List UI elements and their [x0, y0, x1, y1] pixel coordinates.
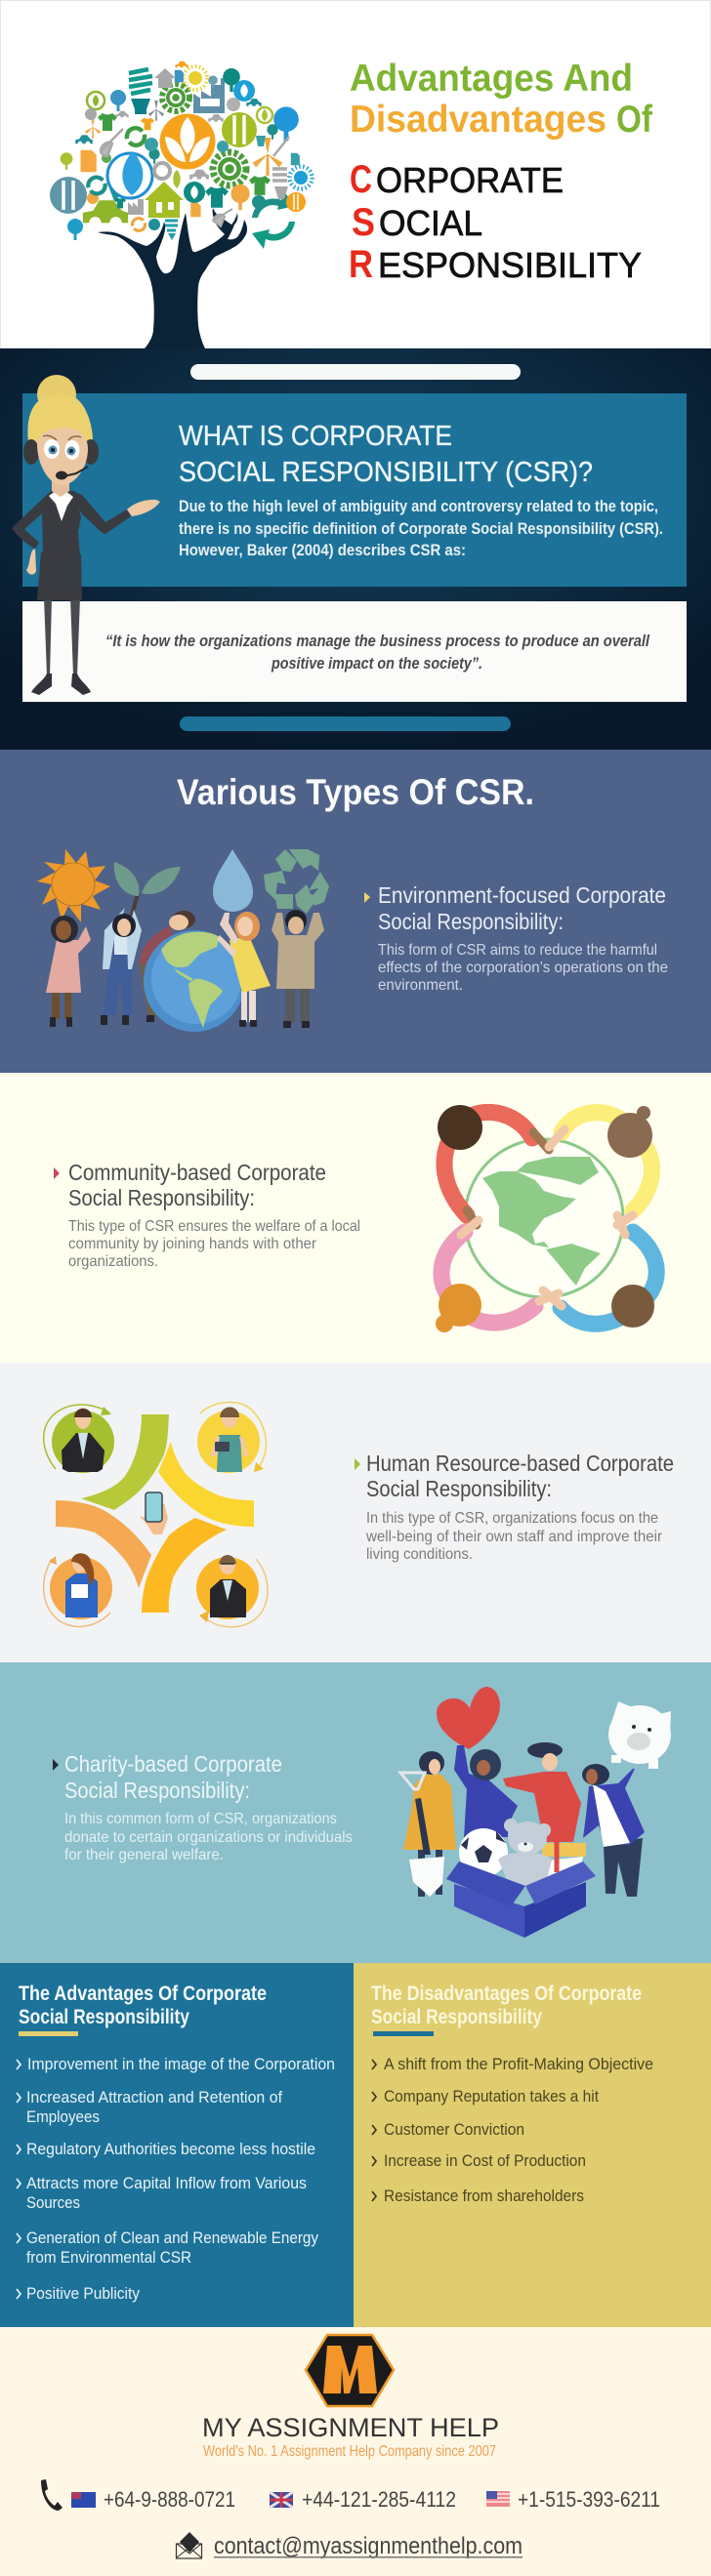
list: disadvantages — [372, 2055, 653, 2205]
collar — [49, 487, 73, 521]
panel: various types of CSR (environment) — [0, 750, 711, 1073]
leaf — [114, 862, 181, 916]
illustration: people holding hands around the globe — [436, 1105, 656, 1332]
list: advantages: Positive Publicity — [26, 2284, 140, 2303]
heading: environment-focused: Social Responsibility: — [378, 909, 564, 934]
tree trunk — [98, 208, 247, 348]
text: community-based description: This type of CSR ensures the welfare of a local — [68, 1218, 360, 1235]
gift — [537, 1840, 586, 1880]
heading: human resource-based — [366, 1451, 674, 1501]
recycle symbol — [264, 849, 329, 914]
list: disadvantages: Increase in Cost of Production — [384, 2151, 586, 2170]
text: charity-based description: In this common form of CSR, organizations — [64, 1811, 337, 1827]
title: corporate social responsibility: ORPORATE — [376, 160, 564, 200]
list: advantages — [17, 2055, 335, 2303]
subtitle: advantages and disadvantages: Advantages And — [350, 58, 633, 100]
icon: CSR tree illustration — [50, 61, 313, 348]
piggy bank — [608, 1701, 671, 1769]
text: charity-based description: donate to certain organizations or individuals — [64, 1829, 353, 1846]
phone: United States: +1-515-393-6211 — [518, 2487, 660, 2512]
heading: advantages: Social Responsibility — [19, 2006, 189, 2028]
heart — [437, 1687, 500, 1749]
text: human resource-based description — [365, 1510, 663, 1563]
text: community-based description — [68, 1218, 360, 1270]
panel: footer — [0, 2327, 711, 2576]
list: disadvantages: Company Reputation takes a hit — [384, 2087, 599, 2106]
company name: MY ASSIGNMENT HELP — [202, 2413, 499, 2442]
heading: disadvantages: The Disadvantages Of Corporate — [371, 1983, 642, 2005]
heading: advantages: The Advantages Of Corporate — [19, 1983, 267, 2005]
headset microphone — [63, 467, 88, 476]
globe — [144, 930, 245, 1032]
volunteer in blue, raising heart — [454, 1745, 518, 1837]
skirt — [37, 552, 82, 600]
heading: advantages — [19, 1983, 267, 2028]
text: CSR definition intro — [179, 497, 663, 559]
volunteer in yellow with shovel — [400, 1751, 456, 1897]
hands — [461, 1129, 633, 1306]
text: community-based description: community by joining hands with other — [68, 1236, 317, 1252]
text: human resource-based description: living conditions. — [366, 1546, 473, 1563]
volunteer in red — [503, 1742, 581, 1842]
volunteer with white shirt, raising piggy bank — [582, 1764, 645, 1897]
tagline: World's No. 1 Assignment Help Company since 2007 — [203, 2443, 496, 2460]
heading: environment-focused — [378, 882, 666, 934]
shoes — [31, 674, 52, 695]
text: environment-focused description: environment. — [378, 977, 463, 994]
panel: disadvantages — [354, 1963, 711, 2327]
eyes — [44, 439, 60, 459]
donation box — [446, 1861, 596, 1938]
logo — [306, 2335, 394, 2406]
open hand — [127, 500, 160, 516]
person in tan coat — [272, 910, 324, 1028]
bullet — [54, 1167, 60, 1179]
panel: what is CSR — [0, 348, 711, 750]
list: disadvantages: Customer Conviction — [384, 2120, 524, 2139]
heading: charity-based: Social Responsibility: — [64, 1778, 250, 1803]
icon: phone — [41, 2479, 63, 2511]
face — [37, 428, 88, 485]
continents — [482, 1157, 601, 1286]
staff 2 — [197, 1403, 266, 1473]
person in yellow — [217, 912, 271, 1027]
phone — [140, 1503, 168, 1534]
heading: community-based: Community-based Corporate — [68, 1160, 326, 1185]
water drop — [213, 849, 253, 912]
panel: charity-based CSR — [0, 1662, 711, 1963]
subtitle: advantages and disadvantages — [350, 58, 653, 141]
text: community-based description: organizations. — [68, 1253, 158, 1270]
heading: human resource-based: Social Responsibility: — [366, 1476, 552, 1501]
heading: charity-based: Charity-based Corporate — [64, 1751, 282, 1777]
list: advantages: Attracts more Capital Inflow from Various — [26, 2174, 307, 2192]
heading: disadvantages — [371, 1983, 642, 2028]
icon cluster — [50, 61, 313, 249]
panel: advantages — [0, 1963, 354, 2327]
list: advantages: Generation of Clean and Renewable Energy — [26, 2228, 318, 2247]
jacket and left arm — [12, 491, 81, 556]
text: CSR definition intro: However, Baker (2004) describes CSR as: — [179, 541, 466, 559]
illustration: volunteers around donation box — [400, 1687, 671, 1938]
bullet — [364, 892, 370, 903]
person in pink — [46, 916, 91, 1027]
bullet — [355, 1458, 360, 1470]
text: human resource-based description: well-being of their own staff and improve their — [365, 1529, 663, 1545]
heading: what is corporate social responsibility — [179, 421, 593, 488]
staff 1 — [44, 1405, 114, 1473]
teddy bear — [498, 1819, 552, 1889]
hand on hip — [26, 549, 36, 575]
email address: contact@myassignmenthelp.com — [214, 2533, 523, 2559]
hair bun — [37, 375, 76, 414]
neck — [52, 476, 69, 497]
list: advantages: Employees — [26, 2107, 100, 2126]
bullet — [53, 1759, 59, 1771]
heads — [438, 1105, 482, 1150]
text: environment-focused description: This form of CSR aims to reduce the harmful — [378, 942, 657, 959]
text: environment-focused description: effects of the corporation’s operations on the — [378, 960, 668, 976]
subtitle: advantages and disadvantages: Disadvantages — [350, 99, 606, 141]
heading: environment-focused: Environment-focused Corporate — [378, 882, 666, 908]
person in blue overalls — [101, 908, 142, 1025]
text: quote: positive impact on the society”. — [271, 654, 482, 673]
heading: various types of CSR: Various Types Of CSR. — [177, 772, 534, 812]
sun — [37, 849, 110, 922]
list: advantages: Sources — [26, 2193, 80, 2212]
text: quote — [105, 632, 650, 673]
heading: charity-based — [64, 1751, 282, 1803]
illustration: people holding earth, sun, leaf, water and recycling symbols — [37, 849, 329, 1032]
title: corporate social responsibility: S — [352, 201, 375, 244]
title: corporate social responsibility: R — [349, 243, 373, 286]
title: corporate social responsibility: OCIAL — [379, 203, 482, 243]
icon: envelope — [176, 2532, 201, 2558]
section background: header — [0, 0, 711, 348]
right arm — [74, 492, 131, 534]
heading: what is corporate social responsibility: WHAT IS CORPORATE — [179, 421, 452, 452]
phone: United Kingdom: +44-121-285-4112 — [302, 2487, 456, 2512]
title: corporate social responsibility — [349, 158, 642, 286]
staff 3 — [44, 1553, 112, 1626]
heading: community-based — [68, 1160, 326, 1210]
panel: human resource-based CSR — [0, 1363, 711, 1662]
person in red behind globe — [139, 911, 195, 1022]
legs — [44, 597, 80, 675]
staff 4 — [196, 1555, 268, 1627]
subtitle: advantages and disadvantages: Of — [616, 99, 653, 141]
central arc shapes — [81, 1414, 169, 1510]
heading: disadvantages: Social Responsibility — [371, 2006, 542, 2028]
list: advantages: Regulatory Authorities become less hostile — [26, 2140, 315, 2158]
football — [459, 1828, 508, 1877]
icon: woman with headset — [12, 375, 160, 695]
title — [349, 58, 653, 286]
title: corporate social responsibility: C — [350, 158, 372, 201]
list: disadvantages: Resistance from shareholders — [384, 2187, 584, 2205]
panel: community-based CSR — [0, 1073, 711, 1363]
text: charity-based description — [64, 1811, 353, 1863]
illustration: four staff members around phone — [44, 1403, 268, 1627]
phone: New Zealand: +64-9-888-0721 — [104, 2487, 235, 2512]
heading: what is corporate social responsibility: SOCIAL RESPONSIBILITY (CSR)? — [179, 457, 593, 488]
list: disadvantages: A shift from the Profit-Making Objective — [384, 2055, 653, 2073]
text: charity-based description: for their general welfare. — [64, 1847, 224, 1863]
hair — [27, 395, 93, 454]
arms — [441, 1112, 656, 1324]
headset — [23, 439, 39, 465]
list: advantages: Increased Attraction and Retention of — [26, 2088, 282, 2106]
text: environment-focused description — [378, 942, 668, 994]
text: human resource-based description: In this type of CSR, organizations focus on the — [366, 1510, 658, 1527]
list: advantages: from Environmental CSR — [26, 2248, 191, 2267]
list: advantages: Improvement in the image of the Corporation — [27, 2055, 335, 2073]
heading: community-based: Social Responsibility: — [68, 1185, 255, 1210]
heading: human resource-based: Human Resource-based Corporate — [366, 1451, 674, 1476]
title: corporate social responsibility: ESPONSIBILITY — [378, 245, 642, 285]
